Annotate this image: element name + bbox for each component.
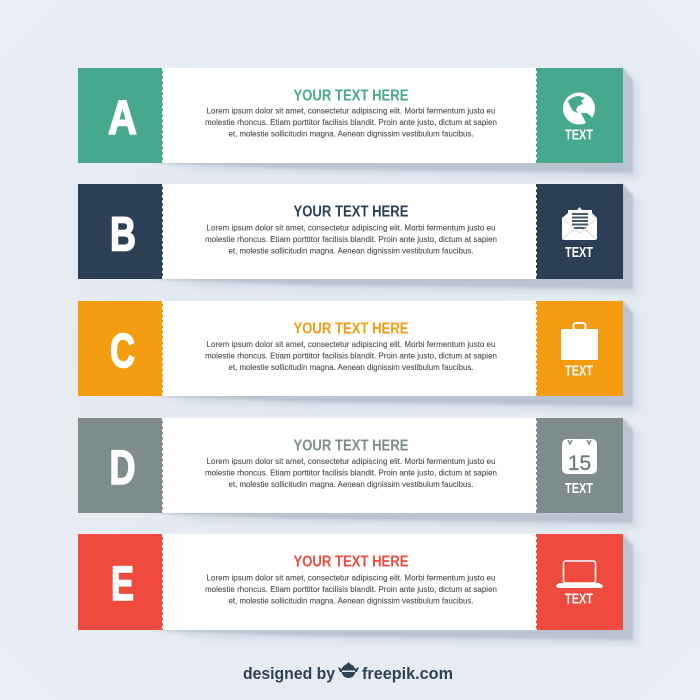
body text C: et, molestie sollicitudin magna. Aenean dignissim vestibulum faucibus. <box>228 362 474 372</box>
body text C: molestie rhoncus. Etiam porttitor facilisis blandit. Proin ante justo, dictum at sapien <box>205 350 497 360</box>
body text D <box>205 456 497 489</box>
body text B <box>205 222 497 256</box>
icon: open envelope <box>562 207 597 240</box>
body text E: et, molestie sollicitudin magna. Aenean dignissim vestibulum faucibus. <box>228 596 474 606</box>
label TEXT B: TEXT <box>565 245 593 261</box>
letter E: E <box>111 558 134 611</box>
body text D: molestie rhoncus. Etiam porttitor facilisis blandit. Proin ante justo, dictum at sapien <box>205 468 497 478</box>
letter A: A <box>108 92 137 145</box>
icon: calendar: 15 <box>568 452 591 475</box>
label TEXT C: TEXT <box>565 364 593 380</box>
heading B: YOUR TEXT HERE <box>294 204 408 220</box>
body text B: et, molestie sollicitudin magna. Aenean dignissim vestibulum faucibus. <box>228 246 474 256</box>
body text D: Lorem ipsum dolor sit amet, consectetur adipiscing elit. Morbi fermentum justo eu <box>206 456 496 466</box>
panel: banner A <box>78 68 639 179</box>
body text A: Lorem ipsum dolor sit amet, consectetur adipiscing elit. Morbi fermentum justo eu <box>206 106 496 116</box>
body text E: Lorem ipsum dolor sit amet, consectetur adipiscing elit. Morbi fermentum justo eu <box>206 572 496 582</box>
body text E: molestie rhoncus. Etiam porttitor facilisis blandit. Proin ante justo, dictum at sapien <box>205 584 497 594</box>
panel: banner E <box>78 534 639 646</box>
footer: designed by freepik.com: freepik.com <box>362 664 453 683</box>
body text C: Lorem ipsum dolor sit amet, consectetur adipiscing elit. Morbi fermentum justo eu <box>206 339 496 349</box>
letter D: D <box>110 442 136 495</box>
icon: laptop <box>556 561 603 588</box>
letter C: C <box>110 325 135 378</box>
icon: globe <box>563 92 595 124</box>
panel: banner C <box>78 301 639 412</box>
body text C <box>205 339 497 372</box>
body text B: molestie rhoncus. Etiam porttitor facilisis blandit. Proin ante justo, dictum at sapien <box>205 234 497 244</box>
body text A: et, molestie sollicitudin magna. Aenean dignissim vestibulum faucibus. <box>228 128 474 138</box>
body text A: molestie rhoncus. Etiam porttitor facilisis blandit. Proin ante justo, dictum at sapien <box>205 117 497 127</box>
label TEXT D: TEXT <box>565 481 593 497</box>
footer: designed by freepik.com <box>243 662 453 683</box>
body text D: et, molestie sollicitudin magna. Aenean dignissim vestibulum faucibus. <box>228 479 474 489</box>
heading C: YOUR TEXT HERE <box>294 320 408 338</box>
icon: calendar <box>562 439 597 475</box>
body text B: Lorem ipsum dolor sit amet, consectetur adipiscing elit. Morbi fermentum justo eu <box>206 222 496 232</box>
icon: freepik logo <box>338 662 359 678</box>
heading E: YOUR TEXT HERE <box>294 554 408 570</box>
heading A: YOUR TEXT HERE <box>294 88 408 104</box>
icon: briefcase <box>561 323 598 360</box>
body text A <box>205 106 497 138</box>
panel: banner B <box>78 184 639 295</box>
heading D: YOUR TEXT HERE <box>294 438 408 454</box>
label TEXT A: TEXT <box>565 128 593 144</box>
letter B: B <box>110 208 136 262</box>
body text E <box>205 572 497 606</box>
footer: designed by freepik.com: designed by <box>243 664 336 683</box>
panel: banner D <box>78 418 639 529</box>
label TEXT E: TEXT <box>565 592 593 608</box>
